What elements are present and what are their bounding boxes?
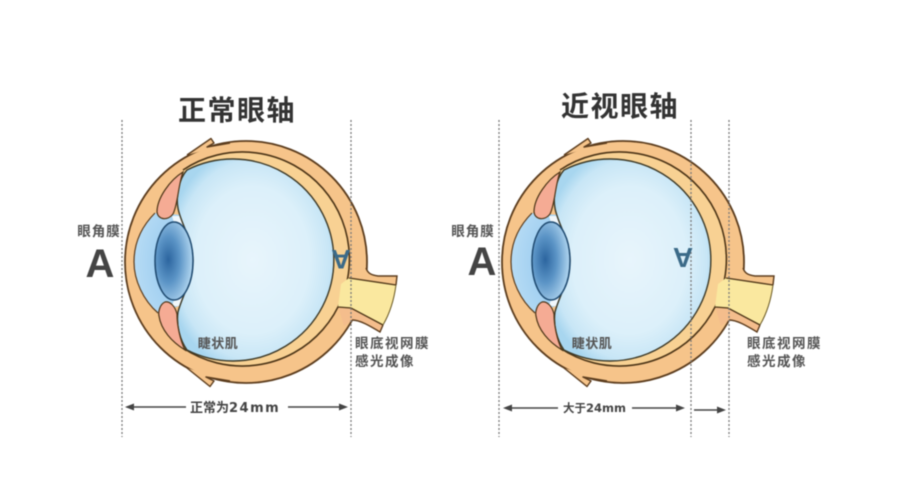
inverted image A on retina left: A — [331, 244, 351, 274]
label: retina imaging left: 眼底视网膜 — [355, 335, 430, 351]
label: ciliary muscle right: 睫状肌 — [572, 336, 612, 351]
dimension arrow: greater than 24mm: 大于24mm — [563, 401, 626, 415]
label: retina imaging right: 眼底视网膜 — [747, 335, 822, 351]
label: retina imaging left: 感光成像 — [355, 353, 415, 369]
title: normal eye axis: 正常眼轴 — [178, 95, 296, 126]
label: ciliary muscle left: 睫状肌 — [198, 336, 238, 351]
dimension arrow: greater than 24mm — [503, 401, 685, 415]
label: cornea left: 眼角膜 — [77, 223, 121, 239]
label: cornea right: 眼角膜 — [451, 223, 495, 239]
dimension arrow: normal 24mm: 正常为24mm — [190, 400, 280, 416]
label: retina imaging right — [747, 335, 822, 369]
illustration: normal eye — [125, 138, 397, 386]
label: retina imaging left — [355, 335, 430, 369]
title: myopic eye axis: 近视眼轴 — [561, 91, 679, 122]
letter A right: A — [468, 240, 496, 284]
illustration: myopic eye — [502, 138, 774, 386]
inverted image A in front of retina right: A — [673, 242, 693, 273]
dimension arrow: extra length — [694, 406, 726, 414]
label: retina imaging right: 感光成像 — [747, 353, 807, 369]
letter A left: A — [86, 242, 114, 286]
dimension arrow: normal 24mm — [125, 400, 348, 416]
